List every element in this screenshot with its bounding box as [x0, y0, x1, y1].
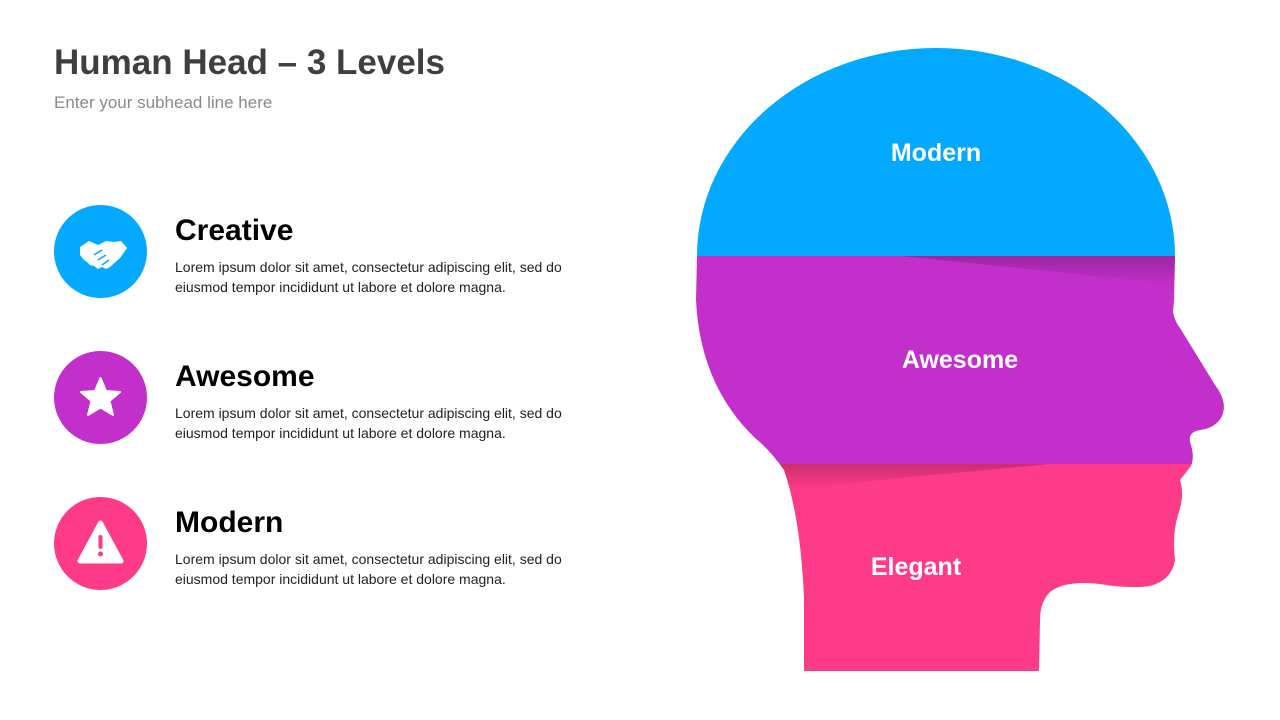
- text: Lorem ipsum dolor sit amet, consectetur adipiscing elit, sed do eiusmod tempor incididunt ut labore et dolore magna.: [175, 259, 562, 295]
- band: Modern: [697, 48, 1175, 256]
- icon: handshake: [54, 205, 147, 298]
- label: Awesome: Awesome: [902, 346, 1018, 374]
- label: Elegant: Elegant: [871, 553, 962, 581]
- item: Awesome: [54, 351, 562, 444]
- text: Lorem ipsum dolor sit amet, consectetur adipiscing elit, sed do eiusmod tempor incididunt ut labore et dolore magna.: [175, 551, 562, 587]
- head diagram: [696, 48, 1224, 671]
- text: Lorem ipsum dolor sit amet, consectetur adipiscing elit, sed do eiusmod tempor incididunt ut labore et dolore magna.: [175, 405, 562, 441]
- subtitle: Enter your subhead line here: [54, 93, 272, 112]
- heading: Modern: [175, 506, 283, 539]
- title: Human Head – 3 Levels: [54, 43, 445, 82]
- band: Elegant: [780, 464, 1192, 671]
- item: Creative: [54, 205, 562, 298]
- icon: warning: [54, 497, 147, 590]
- item: Modern: [54, 497, 562, 590]
- heading: Creative: [175, 214, 293, 247]
- icon: star: [54, 351, 147, 444]
- band: Awesome: [680, 256, 1240, 464]
- label: Modern: Modern: [891, 139, 981, 167]
- heading: Awesome: [175, 360, 315, 393]
